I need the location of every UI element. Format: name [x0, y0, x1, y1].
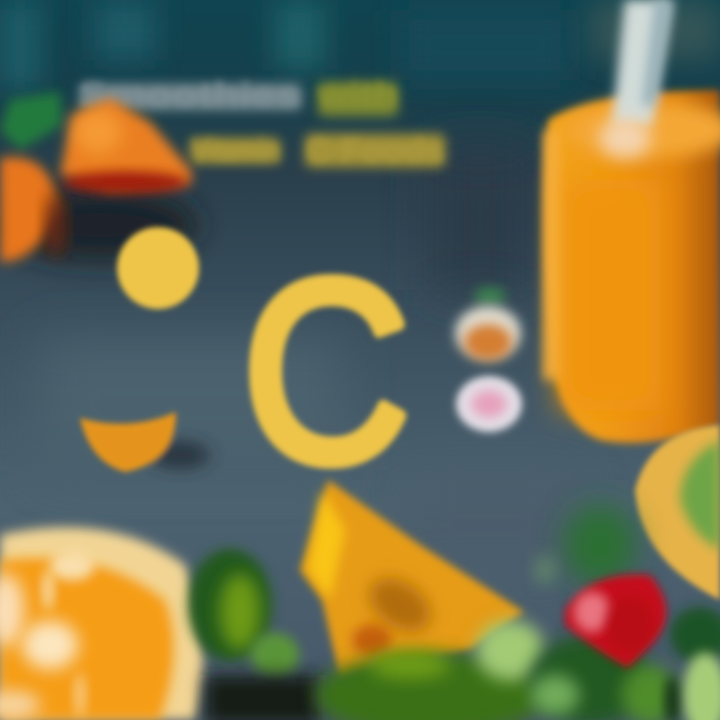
icon: oranges top left [0, 92, 200, 263]
salad greens bottom right [315, 505, 720, 720]
title [78, 76, 445, 170]
yellow triangular fruit wedge [300, 480, 524, 678]
icon: small peach pill [455, 287, 521, 360]
radish [565, 574, 666, 668]
icon: yellow circle [117, 227, 199, 309]
orange slice bottom left [0, 527, 203, 720]
big letter C: C [243, 227, 409, 515]
icon: small pink pill [456, 376, 522, 432]
title: C Foods [306, 132, 444, 170]
title: Vitamin [192, 132, 280, 170]
title: with [317, 76, 398, 114]
citrus ring right [635, 425, 720, 600]
icon: orange wedge [80, 412, 210, 472]
green leaf left [188, 549, 320, 720]
straw [612, 0, 672, 125]
glass of smoothie [543, 0, 720, 443]
title: Smoothies [78, 76, 300, 114]
